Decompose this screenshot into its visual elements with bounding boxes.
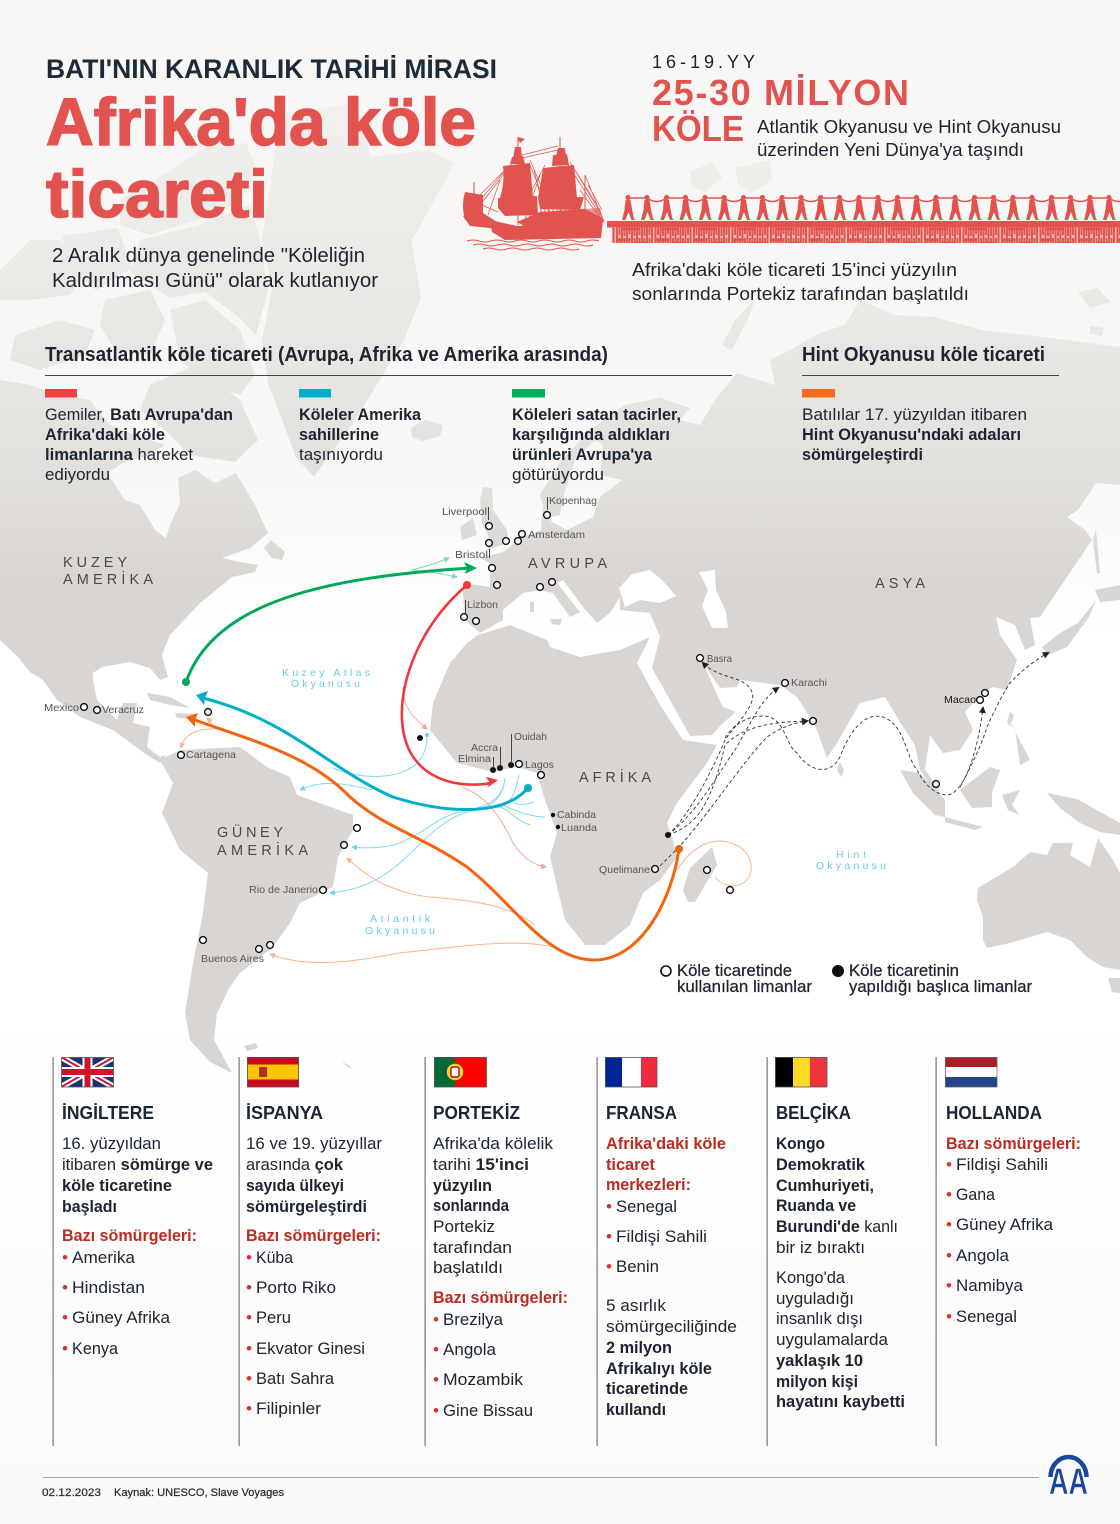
- map: Eurasia: [463, 300, 1120, 792]
- port labels: Basra: [707, 653, 732, 665]
- panel: France: merkezleri:: [606, 1175, 691, 1194]
- panel: Portugal: •: [433, 1310, 439, 1329]
- panel: Belgium: milyon kişi: [776, 1372, 858, 1391]
- panel: England: Kenya: [72, 1339, 119, 1358]
- illustration: line of enslaved people: [607, 195, 1120, 243]
- legend item: red route: Afrika'daki köle: [45, 425, 165, 444]
- panel: England: Güney Afrika: [72, 1308, 171, 1327]
- world map: [0, 103, 1120, 1073]
- continent labels: AMERİKA: [217, 841, 308, 859]
- panel: Portugal: Afrika'da kölelik: [433, 1134, 554, 1153]
- port labels: Elmina: [458, 753, 491, 765]
- panel: Portugal: •: [433, 1340, 439, 1359]
- panel: Portugal: •: [433, 1401, 439, 1420]
- port labels: Macao: [944, 694, 976, 706]
- panel: Spain: Batı Sahra: [256, 1369, 335, 1388]
- port labels: Lagos: [525, 759, 554, 771]
- panel: Portugal: Gine Bissau: [443, 1401, 533, 1420]
- panel: France: •: [606, 1197, 612, 1216]
- panel: Netherlands: [936, 1057, 1081, 1446]
- panel: Spain: Ekvator Ginesi: [256, 1339, 365, 1358]
- map key: ports used: [661, 962, 813, 996]
- logo: Anadolu Agency: [1049, 1457, 1088, 1502]
- thin red routes: [403, 687, 546, 867]
- panel: Netherlands: Güney Afrika: [956, 1215, 1054, 1234]
- panel: England: •: [62, 1339, 68, 1358]
- panel: France: Afrika'daki köle: [606, 1134, 726, 1153]
- panel: Netherlands: Namibya: [956, 1276, 1024, 1295]
- thin green routes: [411, 558, 457, 577]
- port labels: Rio de Janerio: [249, 884, 318, 896]
- panel: Netherlands: •: [946, 1215, 952, 1234]
- route: teal main: [196, 691, 532, 810]
- port labels: Amsterdam: [528, 529, 585, 541]
- panel: Portugal: Portekiz: [433, 1217, 495, 1236]
- flag: Belgium: [775, 1057, 827, 1087]
- legend item: orange route: Batılılar 17. yüzyıldan itibaren: [802, 405, 1027, 424]
- thin orange routes: [181, 718, 751, 963]
- panel: Portugal: •: [433, 1370, 439, 1389]
- map: Greenland: [262, 103, 454, 477]
- port labels: Cabinda: [557, 809, 596, 821]
- panel: England: İNGİLTERE: [62, 1103, 154, 1123]
- legend item: green route: Köleleri satan tacirler,: [512, 405, 681, 424]
- flag: France: [605, 1057, 657, 1087]
- ocean labels: Okyanusu: [365, 925, 435, 937]
- panel: Belgium: Kongo'da: [776, 1268, 846, 1287]
- headline statistic: KÖLE: [652, 108, 744, 149]
- panel: Spain: 16 ve 19. yüzyıllar: [246, 1134, 382, 1153]
- logo: Anadolu Agency: AA: [1049, 1461, 1088, 1502]
- panel: France: sömürgeciliğinde: [606, 1317, 737, 1336]
- map: Novaya Zemlya: [722, 298, 755, 350]
- map: North America: [0, 380, 268, 763]
- panel: Portugal: [424, 1057, 568, 1446]
- panel: France: 2 milyon: [606, 1338, 672, 1357]
- panel: Spain: •: [246, 1399, 252, 1418]
- legend item: teal route: taşınıyordu: [299, 445, 383, 464]
- panel: Portugal: yüzyılın: [433, 1176, 492, 1195]
- panel: Spain: arasında çok: [246, 1155, 344, 1174]
- legend item: teal route: Köleler Amerika: [299, 405, 422, 424]
- panel: Netherlands: •: [946, 1307, 952, 1326]
- panel: France: 5 asırlık: [606, 1296, 666, 1315]
- panel: Belgium: uygulamalarda: [776, 1330, 889, 1349]
- ocean labels: [282, 667, 886, 937]
- legend item: red route: [45, 389, 233, 484]
- main title line 1: Afrika'da köle: [46, 85, 476, 160]
- panel: Spain: •: [246, 1248, 252, 1267]
- headline statistic: [652, 52, 1061, 160]
- panel: Netherlands: Fildişi Sahili: [956, 1155, 1048, 1174]
- headline statistic: üzerinden Yeni Dünya'ya taşındı: [757, 140, 1024, 160]
- panel: Spain: sayıda ülkeyi: [246, 1176, 344, 1195]
- panel: Portugal: PORTEKİZ: [433, 1103, 520, 1123]
- panel: Netherlands: Bazı sömürgeleri:: [946, 1134, 1081, 1153]
- panel: England: Amerika: [72, 1248, 136, 1267]
- panel: Spain: •: [246, 1308, 252, 1327]
- port labels: Buenos Aires: [201, 953, 264, 965]
- panel: Spain: •: [246, 1369, 252, 1388]
- panel: France: FRANSA: [606, 1103, 677, 1123]
- panel: France: •: [606, 1257, 612, 1276]
- port labels: Mexico: [44, 702, 79, 714]
- map: Arctic islands: [0, 143, 285, 560]
- route: green main: [182, 562, 477, 686]
- panel: Transatlantic heading: Transatlantik köle ticareti (Avrupa, Afrika ve Amerika arasında): [45, 344, 608, 366]
- panel: Belgium: Demokratik: [776, 1155, 866, 1174]
- panel: England: Bazı sömürgeleri:: [62, 1226, 197, 1245]
- text: origin note: sonlarında Portekiz tarafından başlatıldı: [632, 284, 969, 304]
- panel: France: kullandı: [606, 1400, 666, 1419]
- panel: Portugal: sonlarında: [433, 1196, 509, 1215]
- route: red main: [402, 581, 498, 788]
- panel: Belgium: hayatını kaybetti: [776, 1392, 905, 1411]
- ocean labels: Okyanusu: [816, 860, 886, 872]
- panel: Netherlands: Angola: [956, 1246, 1010, 1265]
- panel: Belgium: uyguladığı: [776, 1289, 854, 1308]
- subtitle: [52, 244, 378, 292]
- panel: Portugal: Angola: [443, 1340, 497, 1359]
- panel: Spain: [238, 1057, 382, 1446]
- panel: Spain: •: [246, 1278, 252, 1297]
- headline statistic: 16-19.YY: [652, 52, 755, 72]
- map: Iceland: [411, 420, 443, 441]
- legend item: green route: ürünleri Avrupa'ya: [512, 445, 653, 464]
- legend item: red route: ediyordu: [45, 465, 110, 484]
- panel: Portugal: Brezilya: [443, 1310, 504, 1329]
- continent labels: KUZEY: [63, 555, 127, 571]
- panel: France: Afrikalıyı köle: [606, 1359, 712, 1378]
- panel: Portugal: tarafından: [433, 1238, 512, 1257]
- continent labels: ASYA: [875, 576, 925, 592]
- panel: Indian Ocean heading: Hint Okyanusu köle ticareti: [802, 344, 1045, 366]
- panel: England: •: [62, 1278, 68, 1297]
- panel: Belgium: insanlık dışı: [776, 1309, 863, 1328]
- panel: England: •: [62, 1308, 68, 1327]
- flag: Spain: [247, 1057, 299, 1087]
- legend item: red route: limanlarına hareket: [45, 445, 193, 464]
- legend item: teal route: [299, 389, 422, 464]
- open port markers: [81, 512, 988, 952]
- panel: Netherlands: •: [946, 1185, 952, 1204]
- footer source line: Kaynak: UNESCO, Slave Voyages: [114, 1487, 285, 1499]
- panel: Spain: sömürgeleştirdi: [246, 1197, 367, 1216]
- panel: England: başladı: [62, 1197, 117, 1216]
- panel: England: •: [62, 1248, 68, 1267]
- legend item: teal route: sahillerine: [299, 425, 379, 444]
- legend item: orange route: [802, 389, 1027, 464]
- panel: Belgium: BELÇİKA: [776, 1103, 851, 1123]
- port labels: Cartagena: [186, 749, 236, 761]
- panel: France: Benin: [616, 1257, 659, 1276]
- port labels: Veracruz: [102, 704, 144, 716]
- panel: Netherlands: Senegal: [956, 1307, 1017, 1326]
- panel: Netherlands: •: [946, 1246, 952, 1265]
- continent labels: [63, 555, 925, 859]
- ocean labels: Kuzey Atlas: [282, 667, 370, 679]
- legend item: green route: [512, 389, 681, 484]
- panel: Netherlands: HOLLANDA: [946, 1103, 1042, 1123]
- panel: England: [52, 1057, 213, 1446]
- port labels: [44, 495, 976, 965]
- map key: main ports: yapıldığı başlıca limanlar: [849, 978, 1033, 996]
- panel: Portugal: Bazı sömürgeleri:: [433, 1288, 568, 1307]
- legend item: orange route: sömürgeleştirdi: [802, 445, 923, 464]
- subtitle: Kaldırılması Günü" olarak kutlanıyor: [52, 269, 378, 292]
- continent labels: AFRİKA: [579, 768, 651, 786]
- panel: Portugal: başlatıldı: [433, 1258, 503, 1277]
- panel: England: itibaren sömürge ve: [62, 1155, 213, 1174]
- panel: France: •: [606, 1227, 612, 1246]
- legend item: green route: götürüyordu: [512, 465, 604, 484]
- thin teal routes: [300, 736, 545, 893]
- map: northern islands: [690, 160, 1110, 336]
- flag: Netherlands: [945, 1057, 997, 1087]
- continent labels: AMERİKA: [63, 570, 153, 588]
- port labels: Bristol: [455, 549, 488, 561]
- title block: [46, 54, 497, 292]
- panel: Portugal: Mozambik: [443, 1370, 524, 1389]
- map: islands: [147, 487, 1120, 902]
- panel: Belgium: [766, 1057, 905, 1446]
- panel: Spain: Peru: [256, 1308, 291, 1327]
- map key: ports used: kullanılan limanlar: [677, 978, 813, 996]
- panel: France: ticaretinde: [606, 1379, 688, 1398]
- headline statistic: 25-30 MİLYON: [652, 72, 909, 113]
- panel: Belgium: bir iz bıraktı: [776, 1238, 865, 1257]
- panel: Belgium: yaklaşık 10: [776, 1351, 863, 1370]
- map: Australia: [977, 838, 1120, 993]
- Indian Ocean dashed routes: [656, 653, 1048, 870]
- port labels: Quelimane: [599, 864, 650, 876]
- continent labels: GÜNEY: [217, 823, 283, 841]
- port labels: Ouidah: [514, 731, 547, 743]
- panel: Netherlands: •: [946, 1276, 952, 1295]
- map key: main ports: Köle ticaretinin: [849, 962, 959, 980]
- continent labels: AVRUPA: [528, 556, 607, 572]
- footer source line: [42, 1477, 1039, 1499]
- panel: Netherlands: •: [946, 1155, 952, 1174]
- footer source line: 02.12.2023: [42, 1487, 101, 1499]
- port labels: Lizbon: [467, 599, 498, 611]
- panel: Spain: Küba: [256, 1248, 294, 1267]
- legend item: green route: karşılığında aldıkları: [512, 425, 670, 444]
- panel: France: ticaret: [606, 1155, 655, 1174]
- panel: Spain: Porto Riko: [256, 1278, 336, 1297]
- ocean labels: Atlantik: [370, 913, 431, 925]
- map: Africa: [430, 625, 717, 945]
- subtitle: 2 Aralık dünya genelinde "Köleliğin: [52, 244, 365, 267]
- panel: Belgium: Ruanda ve: [776, 1196, 856, 1215]
- port labels: Karachi: [791, 677, 827, 689]
- panel: Belgium: Kongo: [776, 1134, 825, 1153]
- main title line 2: ticareti: [46, 157, 268, 232]
- main port markers: [417, 735, 671, 838]
- text: origin note: Afrika'daki köle ticareti 15'inci yüzyılın: [632, 260, 957, 280]
- panel: Portugal: tarihi 15'inci: [433, 1155, 529, 1174]
- panel: Spain: Bazı sömürgeleri:: [246, 1226, 381, 1245]
- port labels: Kopenhag: [549, 495, 597, 507]
- panel: France: [596, 1057, 737, 1446]
- flag: United Kingdom: [61, 1057, 114, 1087]
- port labels: Luanda: [561, 822, 597, 834]
- panel: Netherlands: Gana: [956, 1185, 996, 1204]
- panel: Spain: İSPANYA: [246, 1103, 323, 1123]
- route: orange main: [186, 713, 683, 960]
- flag: Portugal: [434, 1057, 486, 1087]
- panel: Spain: Filipinler: [256, 1399, 321, 1418]
- legend item: red route: Gemiler, Batı Avrupa'dan: [45, 405, 233, 424]
- panel: Belgium: Burundi'de kanlı: [776, 1217, 898, 1236]
- map: South America: [160, 747, 353, 1073]
- port labels: Accra: [471, 742, 498, 754]
- panel: Belgium: Cumhuriyeti,: [776, 1176, 874, 1195]
- map key: ports used: Köle ticaretinde: [677, 962, 792, 980]
- kicker: BATI'NIN KARANLIK TARİHİ MİRASI: [46, 54, 497, 84]
- ocean labels: Hint: [836, 849, 866, 861]
- illustration: slave ship: [463, 137, 604, 250]
- map key: main ports: [832, 962, 1033, 996]
- headline statistic: Atlantik Okyanusu ve Hint Okyanusu: [757, 117, 1061, 137]
- panel: Spain: •: [246, 1339, 252, 1358]
- port labels: Liverpool: [442, 506, 487, 518]
- panel: France: Senegal: [616, 1197, 677, 1216]
- legend item: orange route: Hint Okyanusu'ndaki adaları: [802, 425, 1021, 444]
- panel: France: Fildişi Sahili: [616, 1227, 707, 1246]
- text: origin note: [632, 260, 969, 304]
- panel: England: köle ticaretine: [62, 1176, 172, 1195]
- panel: England: Hindistan: [72, 1278, 145, 1297]
- map: inland seas: [619, 570, 676, 607]
- panel: England: 16. yüzyıldan: [62, 1134, 161, 1153]
- ocean labels: Okyanusu: [291, 678, 360, 690]
